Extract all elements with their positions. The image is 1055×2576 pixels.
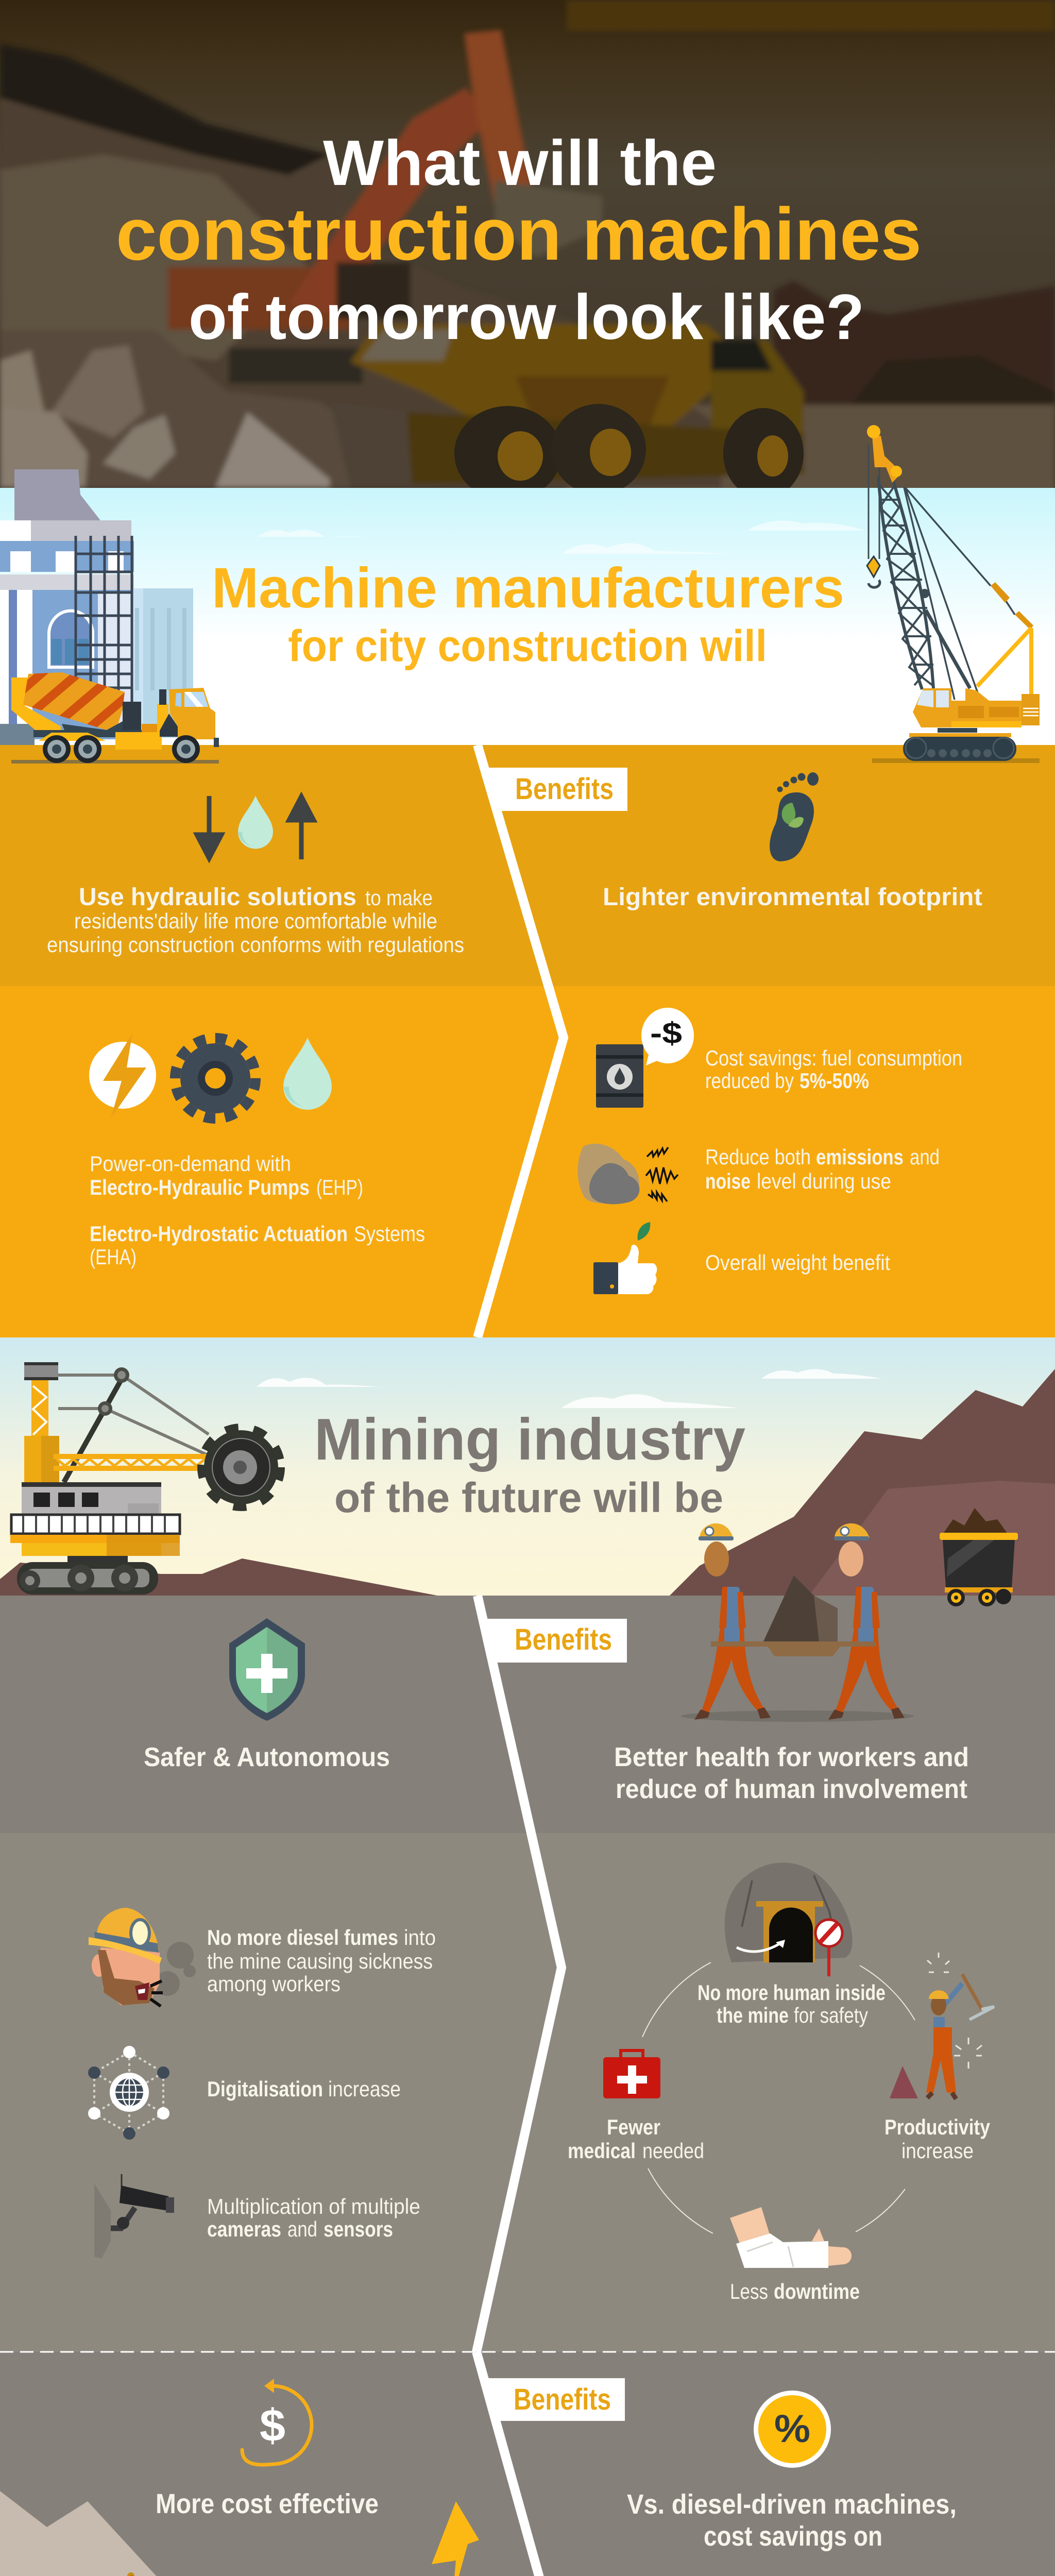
text: power-on-demand: Power-on-demand with xyxy=(90,1151,291,1176)
dashed section separator xyxy=(0,2351,1055,2352)
text: digitalisation increase: increase xyxy=(328,2077,401,2101)
text: productivity increase xyxy=(884,2115,991,2163)
text: reduce emissions: Reduce both xyxy=(705,1145,811,1169)
benefits tag: city xyxy=(482,768,627,811)
title: construction machines xyxy=(116,193,922,276)
text: better health xyxy=(614,1742,969,1804)
illustration: concrete mixer truck xyxy=(10,665,219,764)
icon: security camera xyxy=(94,2174,174,2259)
text: no more diesel fumes: the mine causing sickness xyxy=(207,1949,433,1973)
text: use hydraulic solutions: Use hydraulic solutions xyxy=(79,884,356,911)
text: fewer medical needed xyxy=(568,2115,704,2163)
heading: machine manufacturers: for city construction will xyxy=(288,621,767,671)
icon: lightning bolt xyxy=(432,2501,479,2576)
text: fewer medical needed: medical xyxy=(568,2139,636,2163)
icon: oil barrel with minus dollar: -$ xyxy=(650,1016,682,1050)
icon: footprint with leaf xyxy=(770,772,819,861)
illustration: mine cart top xyxy=(940,1508,1018,1606)
icon: safety shield xyxy=(229,1618,305,1721)
text: better health: Better health for workers and xyxy=(614,1742,969,1772)
benefits tag: mining xyxy=(484,1619,627,1663)
text: more cost effective: More cost effective xyxy=(156,2488,379,2519)
icon: dollar cycle xyxy=(242,2379,312,2465)
text: digitalisation increase: Digitalisation xyxy=(207,2077,323,2101)
text: use hydraulic solutions: to make xyxy=(365,886,433,910)
text: power-on-demand: Electro-Hydraulic Pumps xyxy=(90,1175,310,1199)
scaffold xyxy=(76,536,132,706)
text: multiple cameras xyxy=(207,2194,420,2241)
text: reduce emissions: and xyxy=(910,1145,940,1169)
text: multiple cameras: sensors xyxy=(324,2217,393,2241)
text: reduce emissions xyxy=(705,1145,940,1193)
divider: city panel chevron xyxy=(478,745,564,1337)
text: less downtime xyxy=(730,2279,860,2303)
text: fewer medical needed: needed xyxy=(642,2139,704,2163)
title: of tomorrow look like? xyxy=(189,282,864,353)
text: reduce emissions: level during use xyxy=(757,1169,891,1193)
text: productivity increase: Productivity xyxy=(884,2115,991,2139)
text: no more human inside: for safety xyxy=(794,2003,868,2027)
text: reduce emissions: emissions xyxy=(816,1145,904,1169)
divider: mining lower chevron xyxy=(477,2352,564,2576)
illustration: crawler crane xyxy=(867,425,1040,763)
illustration: bucket wheel excavator xyxy=(10,1362,281,1595)
text: cost savings: Cost savings: fuel consumption xyxy=(705,1046,962,1070)
text: no more diesel fumes: No more diesel fumes xyxy=(207,1925,398,1950)
excavator in photo xyxy=(168,267,350,330)
icon: digitalisation network xyxy=(88,2046,169,2140)
text: better health: reduce of human involvement xyxy=(616,1774,967,1804)
text: overall weight benefit: Overall weight benefit xyxy=(705,1250,890,1275)
benefits tag: cost: Benefits xyxy=(514,2383,611,2416)
title: What will the xyxy=(323,128,717,199)
heading: machine manufacturers: Machine manufacturers xyxy=(212,556,844,620)
text: power-on-demand: Electro-Hydrostatic Actuation xyxy=(90,1222,348,1246)
divider: mining upper chevron xyxy=(477,1596,561,2352)
icon: electricity bolt xyxy=(89,1033,156,1118)
text: cost savings: 5%-50% xyxy=(799,1069,869,1093)
chart: benefits cycle arcs xyxy=(642,1962,915,2233)
panel: mining body xyxy=(0,1596,1055,2576)
heading: mining industry xyxy=(314,1407,745,1521)
text: multiple cameras: cameras xyxy=(207,2217,281,2241)
benefits tag: cost xyxy=(480,2378,625,2421)
icon: first aid kit xyxy=(603,2050,660,2098)
text: power-on-demand xyxy=(90,1151,425,1269)
text: productivity increase: increase xyxy=(901,2139,974,2163)
title xyxy=(116,128,922,353)
panel: city construction left/right body xyxy=(0,745,1055,1337)
icon: percent badge xyxy=(754,2391,831,2468)
text: lighter environmental footprint: Lighter environmental footprint xyxy=(603,884,982,911)
text: cost savings: reduced by xyxy=(705,1069,794,1093)
icon: miner with pickaxe xyxy=(890,1953,994,2099)
illustration: hills behind electric excavator xyxy=(0,2491,515,2576)
icon: gear xyxy=(175,1038,256,1118)
heading: mining industry: Mining industry xyxy=(314,1407,745,1472)
icon: coughing miner xyxy=(89,1908,196,2006)
text: versus diesel-driven: Vs. diesel-driven machines, xyxy=(627,2489,957,2520)
text: versus diesel-driven: cost savings on xyxy=(704,2521,882,2552)
text: power-on-demand: (EHP) xyxy=(316,1175,363,1199)
text: safer and autonomous: Safer & Autonomous xyxy=(144,1742,390,1772)
text: use hydraulic solutions xyxy=(47,884,464,957)
worker heads xyxy=(699,1523,870,1577)
illustration: two workers carrying rock xyxy=(681,1523,914,1722)
text: no more human inside: No more human inside xyxy=(697,1980,886,2005)
heading: mining industry: of the future will be xyxy=(334,1475,723,1521)
icon: hydraulic arrows and drop xyxy=(197,796,314,859)
text: no more human inside: the mine xyxy=(717,2003,789,2027)
text: no more diesel fumes xyxy=(207,1925,436,1996)
text: power-on-demand: (EHA) xyxy=(90,1245,137,1269)
icon: oil barrel with minus dollar xyxy=(596,1008,694,1108)
text: reduce emissions: noise xyxy=(705,1169,751,1193)
benefits tag: city: Benefits xyxy=(515,772,614,806)
text: power-on-demand: Systems xyxy=(354,1222,425,1246)
text: no more human inside xyxy=(697,1980,886,2027)
heading: machine manufacturers xyxy=(212,556,844,671)
text: use hydraulic solutions: residents'daily life more comfortable while xyxy=(74,909,437,933)
icon: fluid drop xyxy=(283,1038,332,1110)
icon: mine entrance with prohibition sign xyxy=(725,1862,853,1976)
illustration: city buildings xyxy=(0,469,193,745)
icon: emissions cloud and noise xyxy=(577,1144,678,1204)
illustration: electric excavator xyxy=(61,2572,356,2576)
text: multiple cameras: and xyxy=(287,2217,317,2241)
text: use hydraulic solutions: ensuring construction conforms with regulations xyxy=(47,933,464,957)
text: less downtime: Less xyxy=(730,2279,768,2303)
text: no more diesel fumes: into xyxy=(404,1925,436,1950)
panel: mining header xyxy=(0,1337,1055,1596)
text: versus diesel-driven xyxy=(627,2489,957,2552)
text: no more diesel fumes: among workers xyxy=(207,1972,341,1996)
text: fewer medical needed: Fewer xyxy=(607,2115,660,2139)
icon: dollar cycle: $ xyxy=(260,2400,285,2451)
benefits tag: mining: Benefits xyxy=(515,1623,612,1656)
icon: thumbs up with leaf xyxy=(593,1222,657,1294)
hero photo background xyxy=(0,0,1055,501)
text: multiple cameras: Multiplication of multiple xyxy=(207,2194,420,2218)
text: cost savings xyxy=(705,1046,962,1093)
icon: percent badge: % xyxy=(774,2407,810,2451)
truck in photo xyxy=(350,324,747,428)
panel: city construction header xyxy=(0,469,1055,745)
icon: arm in cast xyxy=(730,2207,852,2268)
text: less downtime: downtime xyxy=(774,2279,860,2303)
